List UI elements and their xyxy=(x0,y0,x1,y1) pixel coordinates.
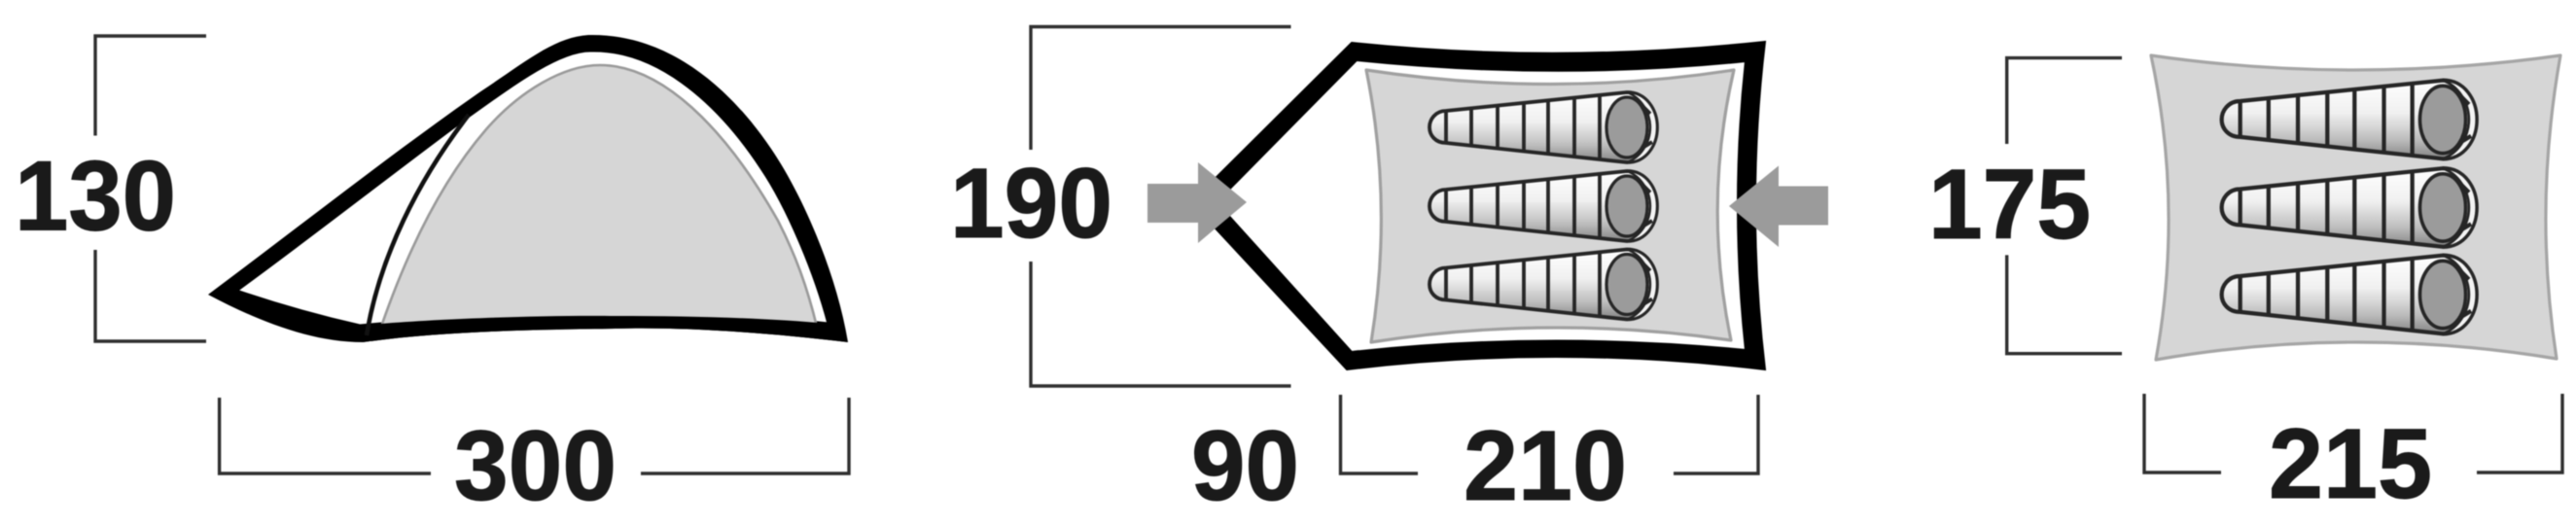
arrow: left door xyxy=(1147,162,1247,243)
sleeping bag 2 xyxy=(2222,168,2477,247)
tent side silhouette xyxy=(208,35,848,342)
label 215: 215 xyxy=(2269,408,2432,519)
sleeping bag 3 xyxy=(1429,249,1657,319)
fly outline plan xyxy=(1191,42,1765,369)
inner tent floor xyxy=(1366,70,1734,342)
door pole line xyxy=(367,115,469,335)
inner tent xyxy=(381,65,817,327)
sleeping bag 3 xyxy=(2222,256,2477,333)
height bracket 130 xyxy=(95,36,206,341)
outer fly outline xyxy=(208,35,848,342)
height bracket 175 xyxy=(2007,58,2122,354)
panel: floor plan with vestibule xyxy=(950,27,1828,521)
width bracket 215 xyxy=(2144,394,2562,472)
ground edge xyxy=(360,316,848,342)
label 175: 175 xyxy=(1928,149,2091,260)
width bracket 300 xyxy=(220,398,849,473)
sleeping bag 2 xyxy=(1429,171,1657,241)
floor sheet xyxy=(2151,55,2560,360)
fly interior xyxy=(236,51,829,326)
arrow: right door xyxy=(1729,165,1828,247)
label 90: 90 xyxy=(1191,410,1299,521)
panel: side view xyxy=(15,35,849,521)
label 300: 300 xyxy=(454,410,617,521)
label 130: 130 xyxy=(15,140,176,251)
width bracket 210 xyxy=(1340,395,1758,473)
label 190: 190 xyxy=(950,148,1112,259)
height bracket 190 xyxy=(1031,27,1291,386)
sleeping bag 1 xyxy=(1429,92,1657,162)
sleeping bag 1 xyxy=(2222,81,2477,158)
panel: inner tent floor plan xyxy=(1928,55,2562,519)
label 210: 210 xyxy=(1464,410,1627,521)
